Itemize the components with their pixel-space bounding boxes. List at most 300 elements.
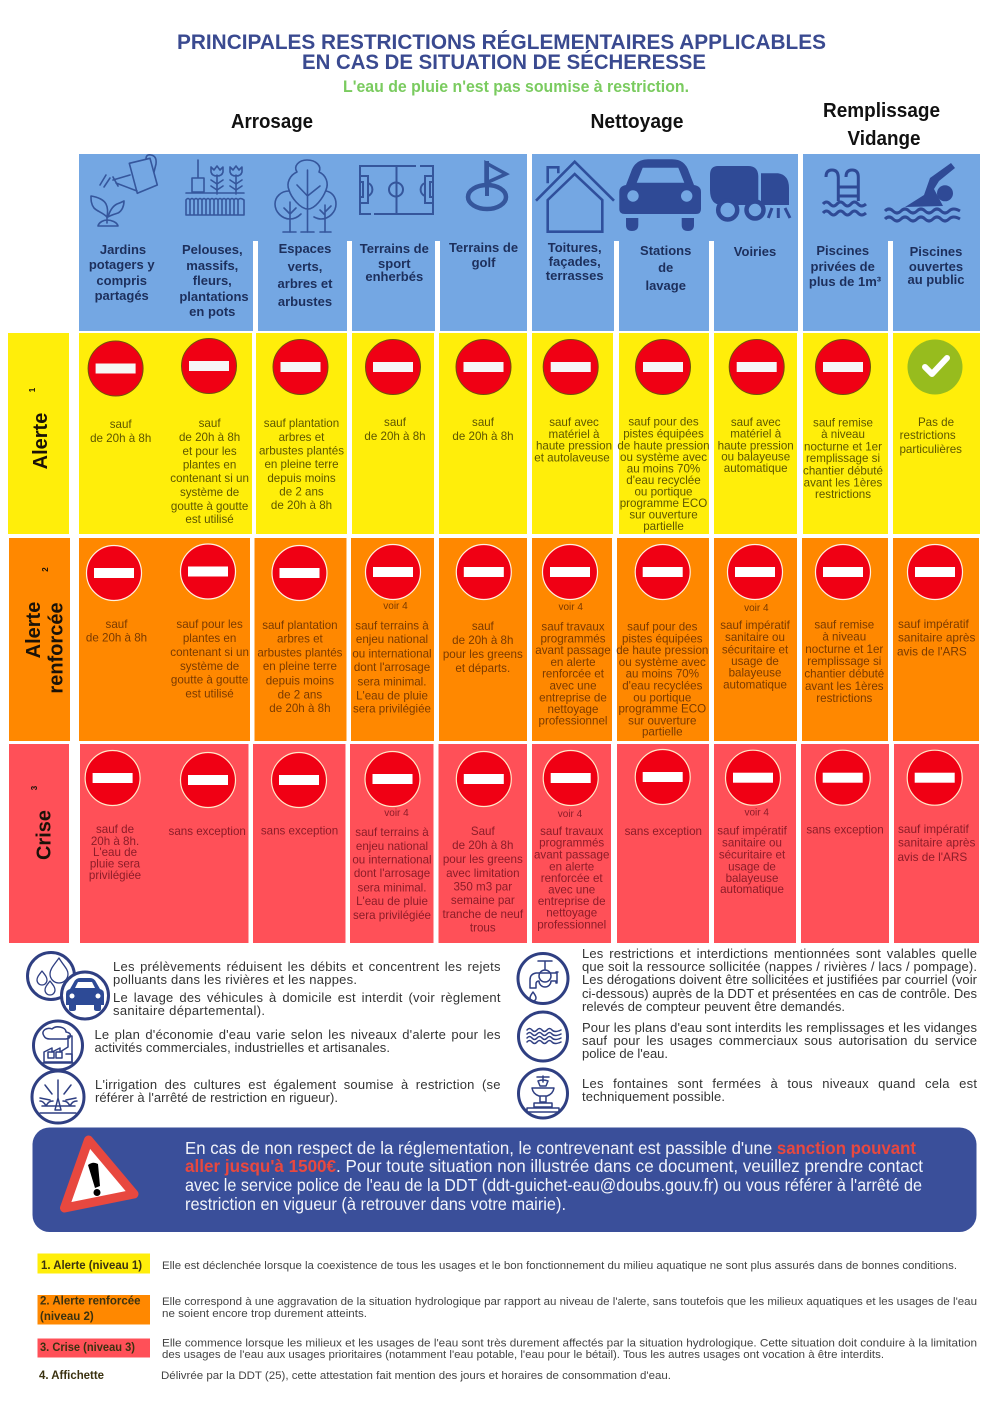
- text: de 20h à 8h: [452, 430, 514, 443]
- column labels: Terrains de: [360, 241, 429, 256]
- text: restrictions: Les dérogations doivent être sollicitées et justifiées par courriel (voir: [582, 972, 978, 987]
- text: restrictions: relevés de compteur peuvent être demandés.: [582, 999, 845, 1014]
- column labels: au public: [907, 272, 965, 287]
- text: L'eau de pluie: [356, 895, 428, 908]
- icon: factory: [34, 1021, 82, 1070]
- text: arbustes plantés: [259, 444, 344, 457]
- icon: green check: [908, 340, 962, 394]
- icon: no entry: [907, 750, 962, 805]
- cell: piscines privées: [801, 744, 889, 943]
- cell: toitures: [532, 538, 612, 741]
- row label: Alerte renforcée: [9, 538, 70, 741]
- cell: stations de lavage: [616, 538, 709, 741]
- text: avec une: [549, 680, 597, 693]
- icon: no entry: [456, 544, 511, 600]
- column labels: massifs,: [186, 258, 238, 273]
- row: Alerte renforcée (niveau 2): [9, 538, 979, 741]
- icon: no entry: [729, 340, 784, 394]
- cell: voiries: [714, 333, 797, 534]
- title block: [177, 31, 826, 96]
- text: sur ouverture: [628, 714, 696, 727]
- text: jardins: L'eau de: [93, 846, 137, 859]
- text: pelouses: plantes en: [183, 632, 236, 645]
- text: semaine par: [451, 894, 515, 907]
- reference note: voir 4: [383, 601, 408, 612]
- row label: Alerte renforcée: renforcée: [46, 602, 68, 694]
- text: renforcée et: [541, 872, 603, 885]
- icon: car: [619, 159, 701, 231]
- legend: crise: Elle commence lorsque les milieux et les usages de l'eau sont très durement affectés par la situation hydrologique. Cette situation doit conduire à la limitation: [162, 1338, 977, 1350]
- icon: no entry: [180, 544, 236, 599]
- text: balayeuse: [729, 667, 781, 680]
- text: ou système avec: [620, 451, 707, 464]
- text: pistes équipées: [622, 632, 703, 645]
- text: prélèvements: sanitaire départemental).: [113, 1003, 265, 1018]
- icon: no entry: [543, 340, 598, 394]
- cell: piscines publiques: [893, 333, 980, 534]
- text: chantier débuté: [804, 668, 884, 681]
- cell: piscines privées: [802, 538, 888, 741]
- column labels: Pelouses,: [182, 242, 243, 257]
- text: en pleine terre: [263, 660, 337, 673]
- icon: house: [536, 162, 614, 232]
- column labels: ouvertes: [909, 259, 963, 274]
- text: pelouses: goutte à goutte: [171, 500, 248, 513]
- text: automatique: [724, 462, 788, 475]
- text: arbres et: [279, 431, 325, 444]
- row label: Alerte: [8, 333, 69, 534]
- text: et départs.: [455, 662, 510, 675]
- icon: no entry: [726, 750, 780, 805]
- text: jardins: de 20h à 8h: [86, 632, 147, 644]
- icon: no entry: [86, 546, 142, 600]
- icon: no entry: [635, 750, 690, 804]
- text: ou international: [352, 647, 432, 660]
- legend: alerte renforcée: (niveau 2): [40, 1311, 94, 1323]
- text: tranche de neuf: [443, 908, 524, 921]
- text: particulières: [899, 443, 962, 456]
- text: sanitaire ou: [725, 631, 785, 644]
- reference note: voir 4: [384, 808, 409, 819]
- category heading: Nettoyage: Nettoyage: [590, 111, 684, 133]
- column labels: Piscines: [816, 243, 869, 258]
- icon: no entry: [543, 750, 598, 806]
- text: de 20h à 8h: [452, 839, 513, 852]
- icon: no entry: [272, 752, 326, 808]
- text: professionnel: [539, 714, 607, 727]
- text: depuis moins: [267, 472, 336, 485]
- text: entreprise de: [539, 691, 607, 704]
- legend: affichette: Délivrée par la DDT (25), cette attestation fait mention des jours et horaires de consommation d'eau.: [161, 1370, 671, 1382]
- icon: waves: [518, 1012, 568, 1061]
- icon: no entry: [908, 544, 962, 600]
- column labels: [546, 240, 776, 293]
- legend: alerte: Elle est déclenchée lorsque la coexistence de tous les usages et le bon fonctionnement du milieu aquatique ne sont plus assurés dans de bonnes conditions.: [162, 1260, 957, 1272]
- text: remplissage si: [806, 452, 880, 465]
- text: ou international: [352, 854, 432, 867]
- text: haute pression: [536, 440, 612, 453]
- icon: tap: [518, 954, 568, 1004]
- text: sauf travaux: [541, 621, 605, 634]
- icon: no entry: [456, 340, 511, 394]
- text: sauf pour des: [627, 621, 698, 634]
- text: sanitaire après: [898, 630, 975, 644]
- text: en alerte: [550, 656, 596, 669]
- icon: swimmer: [885, 163, 960, 221]
- cell: terrains de golf: [439, 333, 527, 534]
- text: pistes équipées: [623, 427, 704, 440]
- text: usage de: [728, 860, 776, 873]
- text: ou portique: [633, 691, 691, 704]
- main title: PRINCIPALES RESTRICTIONS RÉGLEMENTAIRES APPLICABLES: [177, 31, 826, 54]
- text: automatique: [723, 679, 787, 692]
- text: avec limitation: [446, 867, 520, 880]
- text: pelouses: est utilisé: [185, 513, 234, 526]
- text: sauf impératif: [898, 822, 970, 836]
- column labels: partagés: [95, 288, 149, 303]
- column labels: Jardins: [100, 242, 146, 257]
- subtitle: L'eau de pluie n'est pas soumise à restriction.: [343, 77, 689, 96]
- text: sauf travaux: [540, 825, 603, 838]
- text: sauf terrains à: [355, 826, 429, 839]
- icon: car: [62, 972, 108, 1019]
- text: depuis moins: [266, 675, 334, 688]
- text: pelouses: plantes en: [183, 459, 236, 472]
- text: restrictions: [900, 429, 956, 442]
- text: Pas de: [918, 416, 954, 429]
- text: chantier débuté: [803, 464, 883, 477]
- text: plan d'économie: Le plan d'économie d'eau varie selon les niveaux d'alerte pour les: [94, 1027, 501, 1042]
- cell: terrains de sport: [351, 538, 434, 741]
- text: jardins: privilégiée: [89, 869, 141, 882]
- text: prélèvements: Le lavage des véhicules à domicile est interdit (voir règlement: [113, 990, 501, 1005]
- text: pelouses: sauf: [199, 417, 221, 430]
- icon: irrigation: [32, 1071, 84, 1123]
- callout text: En cas de non respect de la réglementation, le contrevenant est passible d'une sanction pouvant: [185, 1138, 922, 1158]
- text: sécuritaire et: [722, 643, 789, 656]
- text: sauf terrains à: [355, 619, 429, 632]
- text: pelouses: de 20h à 8h: [179, 431, 240, 444]
- text: sanitaire ou: [722, 837, 782, 850]
- text: sécuritaire et: [719, 849, 786, 862]
- text: programme ECO: [620, 497, 707, 510]
- text: balayeuse: [726, 872, 778, 885]
- panel: remplissage vidange header: [803, 154, 980, 331]
- text: pelouses: sans exception: [169, 825, 246, 838]
- text: et autolaveuse: [534, 451, 610, 464]
- callout text: aller jusqu'à 1500€. Pour toute situation non illustrée dans ce document, veuillez prendre contact: [185, 1156, 938, 1176]
- text: arbres et: [277, 632, 324, 646]
- text: sauf: [384, 416, 407, 429]
- text: sauf pour des: [628, 416, 699, 429]
- text: remplissage si: [807, 655, 881, 668]
- text: ou portique: [634, 486, 693, 499]
- text: jardins: sauf de: [96, 823, 134, 836]
- column labels: Terrains de: [449, 240, 518, 255]
- icon: no entry: [816, 340, 870, 394]
- icon: trees: [275, 160, 336, 232]
- column labels: en pots: [189, 304, 235, 319]
- column labels: Espaces: [279, 241, 331, 256]
- text: plans d'eau: police de l'eau.: [582, 1046, 668, 1061]
- cell: terrains de golf: [438, 744, 527, 943]
- category heading: Remplissage Vidange: Vidange: [848, 128, 920, 150]
- text: nettoyage: [546, 907, 597, 920]
- text: sera minimal.: [358, 881, 426, 894]
- cell: jardins and pelouses: [79, 333, 252, 534]
- text: plans d'eau: sauf pour les usages commerciaux sous autorisation du service: [582, 1033, 977, 1048]
- cell: jardins and pelouses: [79, 538, 250, 741]
- text: trous: [470, 922, 496, 935]
- icon: no entry: [182, 338, 236, 394]
- text: au moins 70%: [626, 668, 699, 681]
- text: partielle: [643, 520, 684, 533]
- icon: no entry: [88, 341, 143, 396]
- icon: no entry: [728, 544, 782, 600]
- icon: sports field: [360, 166, 433, 214]
- column labels: Stations: [640, 243, 691, 258]
- legend: alerte: 1. Alerte (niveau 1): [41, 1260, 142, 1272]
- column labels: golf: [472, 255, 496, 270]
- icon: no entry: [542, 544, 598, 600]
- text: arbustes plantés: [257, 646, 343, 659]
- text: en alerte: [549, 860, 594, 873]
- text: irrigation: référer à l'arrêté de restriction en rigueur).: [95, 1090, 338, 1105]
- legend: alerte renforcée: Elle correspond à une aggravation de la situation hydrologique par rapport au niveau de l'alerte, sans toutefois que les milieux aquatiques et les usages de l'eau: [162, 1296, 977, 1308]
- text: avant passage: [535, 644, 611, 657]
- cell: piscines privées: [803, 333, 888, 534]
- text: de 2 ans: [279, 486, 324, 499]
- row label: Alerte renforcée: Alerte: [23, 602, 45, 658]
- text: sanitaire après: [898, 836, 975, 850]
- text: nocturne et 1er: [804, 440, 882, 453]
- cell: espaces verts: [253, 744, 346, 943]
- main title: EN CAS DE SITUATION DE SÉCHERESSE: [302, 51, 706, 74]
- cell: toitures: [532, 744, 611, 943]
- text: avant passage: [534, 849, 609, 862]
- text: restrictions: [816, 692, 873, 705]
- text: de 20h à 8h: [271, 499, 332, 512]
- legend: crise: [38, 1338, 977, 1361]
- legend: [38, 1254, 977, 1382]
- text: pour les greens: [443, 648, 523, 661]
- reference note: voir 4: [744, 808, 769, 818]
- row label: Crise: Crise: [34, 810, 56, 860]
- icon: pool ladder: [823, 170, 866, 215]
- text: de haute pression: [616, 644, 708, 657]
- text: avis de l'ARS: [897, 644, 967, 658]
- category heading: Arrosage: Arrosage: [231, 111, 313, 133]
- text: programme ECO: [618, 703, 706, 716]
- text: nettoyage: [548, 703, 598, 716]
- text: jardins: sauf: [106, 618, 128, 631]
- text: sera privilégiée: [353, 702, 431, 716]
- text: dont l'arrosage: [354, 867, 430, 880]
- row label: Alerte: Alerte: [30, 413, 52, 469]
- cell: piscines publiques: [893, 538, 979, 741]
- text: sauf plantation: [264, 417, 339, 430]
- reference note: voir 4: [558, 809, 583, 820]
- text: pelouses: et pour les: [183, 445, 237, 458]
- text: d'eau recyclées: [622, 680, 703, 693]
- text: sera privilégiée: [353, 909, 431, 922]
- text: jardins: de 20h à 8h: [90, 432, 151, 445]
- cell: jardins and pelouses: [80, 744, 248, 943]
- text: automatique: [720, 883, 784, 896]
- text: jardins: 20h à 8h.: [91, 835, 139, 848]
- cell: voiries: [714, 744, 796, 943]
- text: ou système avec: [619, 656, 706, 669]
- icon: warning triangle: [64, 1140, 134, 1208]
- text: sauf plantation: [262, 619, 338, 632]
- text: nocturne et 1er: [805, 643, 883, 656]
- text: jardins: pluie sera: [90, 858, 141, 870]
- text: restrictions: que soit la ressource sollicitée (nappes / rivières / lacs / pompage).: [582, 959, 977, 974]
- text: de 20h à 8h: [452, 634, 513, 647]
- cell: stations de lavage: [617, 744, 709, 943]
- callout: sanction warning: [32, 1128, 976, 1232]
- text: sauf: [472, 416, 495, 429]
- text: sera minimal.: [358, 675, 426, 688]
- text: avec une: [548, 884, 595, 897]
- callout text: restriction en vigueur (à retrouver dans votre mairie).: [185, 1194, 566, 1214]
- column labels: compris: [96, 273, 147, 288]
- text: pelouses: sauf pour les: [176, 618, 243, 631]
- text: sauf: [472, 620, 495, 633]
- text: professionnel: [537, 918, 606, 931]
- panel: notes left: [28, 952, 501, 1123]
- text: fontaines: techniquement possible.: [582, 1089, 725, 1104]
- text: dont l'arrosage: [354, 661, 430, 674]
- cell: terrains de sport: [352, 333, 434, 534]
- text: avant les 1ères: [804, 476, 883, 489]
- legend: crise: des usages de l'eau aux usages prioritaires (notamment l'eau potable, l'eau pour le bétail). Tous les autres usages ont vocation à être interdits.: [162, 1349, 884, 1361]
- column labels: Toitures,: [548, 240, 602, 255]
- column labels: lavage: [645, 278, 686, 293]
- text: partielle: [642, 726, 683, 739]
- column labels: verts,: [288, 259, 322, 274]
- legend: alerte renforcée: [38, 1295, 977, 1324]
- text: à niveau: [821, 428, 865, 441]
- text: prélèvements: Les prélèvements réduisent les débits et concentrent les rejets: [113, 959, 501, 974]
- row: Alerte (niveau 1): [8, 333, 980, 534]
- cell: espaces verts: [254, 538, 346, 741]
- column labels: [809, 243, 965, 289]
- column labels: arbustes: [278, 294, 332, 309]
- icon: no entry: [85, 750, 140, 806]
- column labels: plantations: [179, 289, 249, 304]
- legend: affichette: 4. Affichette: [39, 1370, 104, 1382]
- row label: Alerte: 1: [28, 387, 37, 392]
- column labels: privées de: [811, 259, 875, 274]
- icon: no entry: [456, 752, 511, 806]
- text: irrigation: L'irrigation des cultures est également soumise à restriction (se: [95, 1077, 500, 1092]
- text: avant les 1ères: [805, 680, 884, 693]
- text: enjeu national: [356, 633, 428, 646]
- text: renforcée et: [542, 668, 605, 681]
- icon: no entry: [636, 340, 690, 394]
- legend: alerte renforcée: ne soient encore trop durement atteints.: [162, 1308, 367, 1320]
- cell: stations de lavage: [617, 333, 710, 534]
- cell: terrains de sport: [350, 744, 434, 943]
- text: plans d'eau: Pour les plans d'eau sont interdits les remplissages et les vidanges: [582, 1020, 978, 1035]
- text: pelouses: contenant si un: [170, 472, 249, 485]
- text: programmés: [540, 632, 606, 645]
- text: sauf remise: [814, 619, 874, 632]
- text: en pleine terre: [264, 458, 339, 471]
- panel: nettoyage header: [532, 154, 798, 331]
- column labels: fleurs,: [193, 273, 232, 288]
- column labels: enherbés: [365, 269, 423, 284]
- text: fontaines: Les fontaines sont fermées à tous niveaux quand cela est: [582, 1076, 977, 1091]
- column labels: de: [658, 260, 673, 275]
- text: matériel à: [549, 428, 600, 441]
- icon: no entry: [180, 752, 236, 808]
- text: Sauf: [471, 825, 495, 838]
- panel: notes right: [518, 946, 978, 1118]
- text: ou balayeuse: [721, 451, 790, 464]
- text: sauf impératif: [898, 617, 970, 631]
- column labels: sport: [378, 256, 411, 271]
- column labels: potagers y: [89, 257, 155, 272]
- text: entreprise de: [538, 895, 606, 908]
- column labels: Voiries: [734, 244, 776, 259]
- cell: toitures: [532, 333, 613, 534]
- text: de 20h à 8h: [364, 430, 426, 443]
- text: sauf avec: [549, 416, 599, 429]
- text: pour les greens: [443, 853, 523, 866]
- text: de 20h à 8h: [269, 702, 331, 715]
- column labels: Piscines: [910, 244, 962, 259]
- row label: Crise: 3: [30, 785, 39, 790]
- category heading: Remplissage Vidange: Remplissage: [823, 100, 940, 122]
- text: au moins 70%: [627, 462, 700, 475]
- icon: flower bed with fence: [186, 160, 244, 215]
- legend: alerte: [38, 1254, 957, 1274]
- text: pelouses: système de: [180, 660, 239, 673]
- icon: no entry: [273, 340, 328, 394]
- column labels: arbres et: [278, 276, 333, 291]
- text: sauf impératif: [720, 619, 791, 632]
- text: sans exception: [625, 825, 702, 838]
- text: plan d'économie: activités commerciales, industrielles et artisanales.: [94, 1040, 390, 1055]
- text: sans exception: [261, 824, 338, 838]
- text: restrictions: Les restrictions et interdictions mentionnées sont valables quelle: [582, 946, 977, 961]
- column labels: [89, 240, 518, 319]
- text: pelouses: est utilisé: [185, 688, 234, 701]
- text: usage de: [731, 655, 779, 668]
- row label: Alerte renforcée: 2: [41, 567, 50, 572]
- icon: watering can and plant: [91, 155, 157, 226]
- text: enjeu national: [356, 840, 428, 853]
- cell: piscines publiques: [894, 744, 979, 943]
- icon: water drops: [28, 952, 74, 1000]
- text: programmés: [539, 837, 604, 850]
- text: sans exception: [806, 824, 884, 837]
- panel: arrosage header: [79, 154, 527, 331]
- row: Crise (niveau 3): [9, 744, 979, 943]
- text: prélèvements: polluants dans les rivières et les nappes.: [113, 972, 357, 987]
- text: avis de l'ARS: [898, 850, 967, 864]
- icon: golf flag: [468, 161, 506, 209]
- reference note: voir 4: [744, 603, 769, 614]
- text: restrictions: [815, 488, 871, 501]
- text: L'eau de pluie: [356, 689, 428, 702]
- column labels: terrasses: [546, 268, 604, 283]
- row label: Crise: [9, 744, 69, 943]
- text: de 2 ans: [278, 689, 322, 702]
- text: sauf avec: [731, 416, 781, 429]
